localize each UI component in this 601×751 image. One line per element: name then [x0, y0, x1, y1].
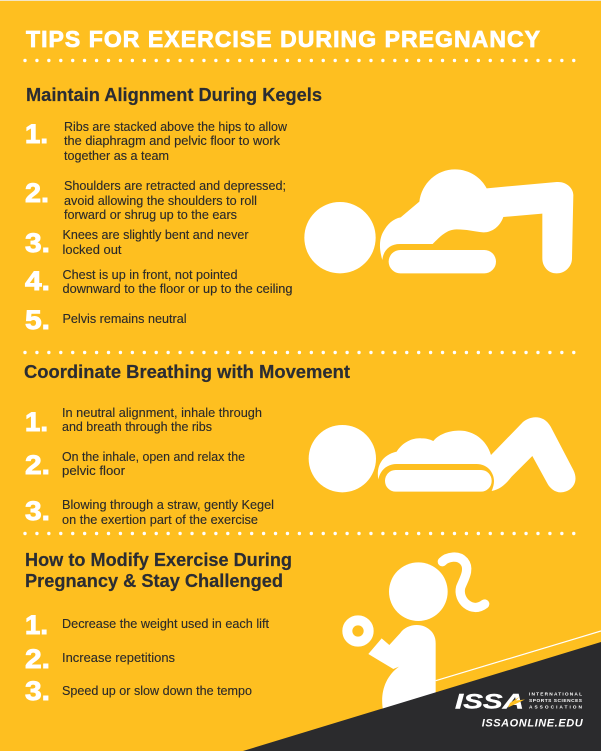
step 2: [25, 178, 286, 222]
step 2: 2.: [25, 644, 50, 674]
step 2: [25, 450, 245, 480]
step 3: Blowing through a straw, gently Kegel: [62, 498, 274, 512]
step 3: on the exertion part of the exercise: [62, 513, 258, 527]
step 4: 4.: [25, 266, 50, 296]
white accent line: [436, 631, 601, 681]
heading: how to modify exercise: Pregnancy & Stay Challenged: [25, 571, 283, 591]
logo: ISSA: INTERNATIONAL: [529, 692, 582, 698]
step 1: Decrease the weight used in each lift: [62, 617, 270, 631]
panel: how to modify exercise: [25, 550, 292, 706]
step 3: [25, 496, 274, 527]
panel: coordinate breathing with movement: [24, 362, 350, 527]
panel: maintain alignment during kegels: [25, 85, 322, 335]
step 5: [25, 305, 186, 335]
logo: ISSA: ISSA: [455, 689, 524, 713]
step 1: Ribs are stacked above the hips to allow: [64, 120, 288, 134]
step 1: [25, 119, 288, 163]
step 2: [25, 644, 175, 674]
step 2: forward or shrug up to the ears: [64, 208, 237, 222]
step 3: [25, 676, 252, 706]
step 2: Shoulders are retracted and depressed;: [64, 179, 286, 193]
dark corner banner: [243, 642, 601, 751]
step 3: 3.: [25, 228, 50, 258]
logo: ISSA: [455, 689, 583, 713]
step 2: pelvic floor: [62, 464, 125, 478]
step 2: On the inhale, open and relax the: [62, 450, 245, 464]
step 4: Chest is up in front, not pointed: [62, 268, 238, 282]
step 1: the diaphragm and pelvic floor to work: [64, 134, 281, 148]
icon: plank figure: [304, 169, 573, 273]
icon: pregnant figure with dumbbell: [347, 557, 485, 710]
step 4: [25, 266, 293, 296]
step 5: Pelvis remains neutral: [62, 312, 186, 326]
step 3: Knees are slightly bent and never: [62, 228, 248, 242]
step 3: Speed up or slow down the tempo: [62, 684, 252, 698]
step 1: 1.: [25, 610, 48, 640]
step 3: locked out: [62, 243, 122, 257]
heading: coordinate breathing: Coordinate Breathing with Movement: [24, 362, 350, 382]
heading: maintain alignment: Maintain Alignment During Kegels: [26, 85, 322, 105]
icon: bridge figure: [309, 417, 575, 492]
step 3: [25, 228, 248, 258]
step 1: In neutral alignment, inhale through: [62, 406, 262, 420]
heading: how to modify exercise: [25, 550, 292, 591]
step 5: 5.: [25, 305, 50, 335]
logo: ISSA: ASSOCIATION: [529, 704, 583, 710]
step 2: 2.: [25, 178, 49, 208]
logo swoosh: [508, 697, 525, 708]
step 4: downward to the floor or up to the ceiling: [62, 282, 293, 296]
step 1: 1.: [25, 119, 48, 149]
heading: how to modify exercise: How to Modify Exercise During: [25, 550, 292, 570]
step 2: Increase repetitions: [62, 651, 175, 665]
step 1: [25, 406, 262, 437]
logo: ISSA: SPORTS SCIENCES: [529, 698, 583, 704]
step 1: 1.: [25, 407, 48, 437]
step 2: 2.: [25, 450, 50, 480]
step 1: together as a team: [64, 149, 169, 163]
step 1: [25, 610, 270, 640]
step 3: 3.: [25, 676, 50, 706]
title: TIPS FOR EXERCISE DURING PREGNANCY: [26, 26, 540, 52]
step 3: 3.: [25, 496, 50, 526]
step 1: and breath through the ribs: [62, 420, 212, 434]
website url: ISSAONLINE.EDU: [482, 718, 584, 730]
step 2: avoid allowing the shoulders to roll: [64, 194, 257, 208]
